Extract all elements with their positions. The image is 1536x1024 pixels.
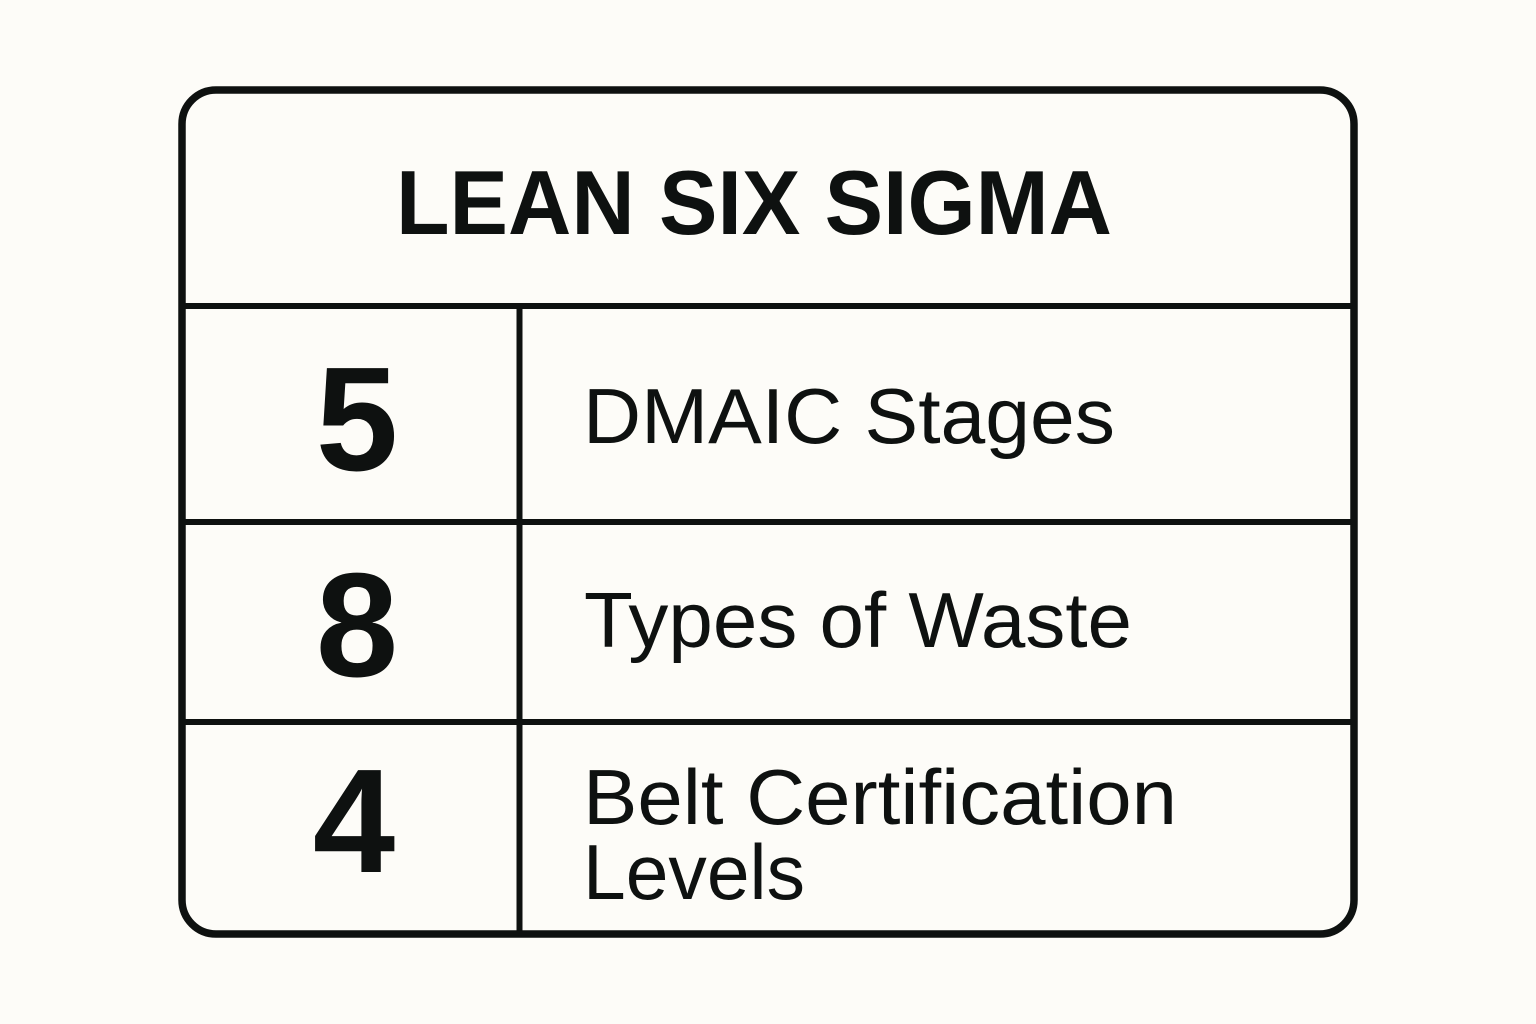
label: Belt Certification Levels: Levels [583,828,805,916]
label: Types of Waste: Types of Waste [584,576,1132,664]
number: 4: 4 [313,739,395,904]
label: Belt Certification Levels: Belt Certification [583,753,1177,841]
table frame [182,90,1354,934]
label: DMAIC Stages: DMAIC Stages [583,372,1115,460]
number: 8: 8 [316,543,398,708]
title: LEAN SIX SIGMA [396,153,1112,254]
number: 5: 5 [316,337,398,502]
label: Belt Certification Levels [583,753,1177,916]
